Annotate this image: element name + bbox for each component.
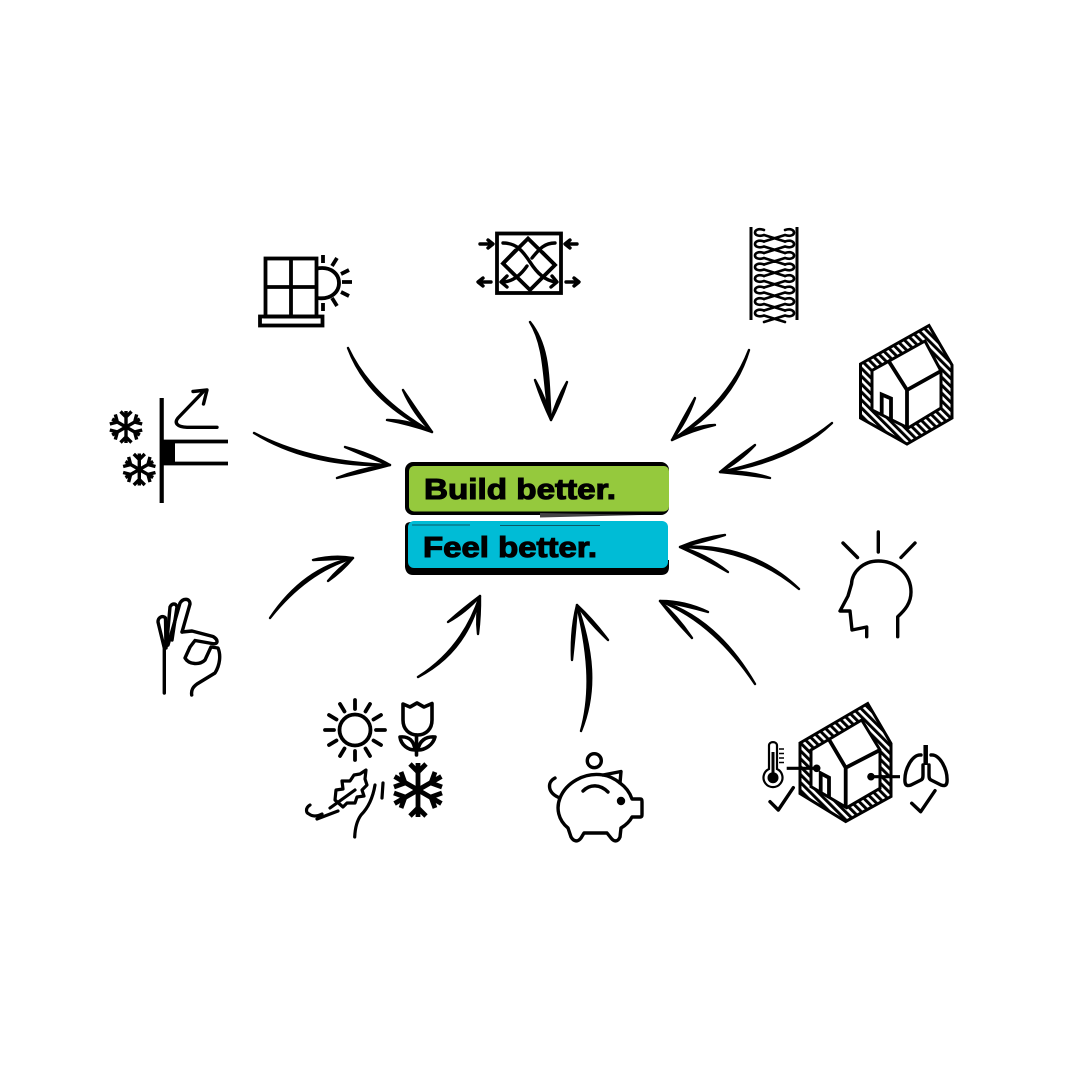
arrow: thermal bridge to title: [254, 433, 390, 478]
icon: four seasons: [306, 700, 442, 837]
icon: piggy bank: [550, 754, 642, 841]
icon: OK hand gesture: [158, 599, 220, 695]
arrow: seasons to title: [418, 596, 480, 677]
icon: check marks: [770, 788, 935, 812]
icon: thermal bridge with snowflakes: [109, 390, 228, 503]
icon: airflow arrows: [478, 240, 579, 286]
icon: heat recovery ventilation core: [478, 234, 579, 293]
arrow: house to title: [720, 423, 832, 478]
text: Build better.: Build better.: [424, 474, 616, 506]
arrow: window to title: [348, 348, 432, 432]
icon: insulation batt: [751, 227, 797, 322]
icon: spring tulip: [400, 703, 435, 755]
icon: lungs: [905, 745, 947, 786]
arrow: ventilation to title: [530, 322, 567, 420]
blue banner: [405, 521, 669, 575]
connector lines: [787, 768, 900, 777]
icon: occupant thinking head: [840, 532, 915, 637]
arrow: hand to title: [270, 557, 353, 618]
arrow: healthy house to title: [660, 601, 755, 684]
arrow: piggy bank to title: [572, 605, 608, 731]
icon: autumn leaf and wind: [306, 770, 383, 837]
text: Feel better.: Feel better.: [423, 532, 597, 564]
icon: window with sun: [260, 255, 352, 326]
green banner: [405, 462, 669, 518]
arrow: insulation to title: [672, 350, 749, 440]
central title: Build better. Feel better.: [405, 462, 669, 575]
icon: house with comfort and health checks: [764, 704, 947, 822]
icon: summer sun: [325, 700, 385, 760]
icon: house with airtight envelope: [860, 326, 952, 444]
arrow: head to title: [680, 535, 799, 589]
icon: winter snowflake: [394, 763, 442, 817]
icon: thermometer: [764, 742, 784, 787]
